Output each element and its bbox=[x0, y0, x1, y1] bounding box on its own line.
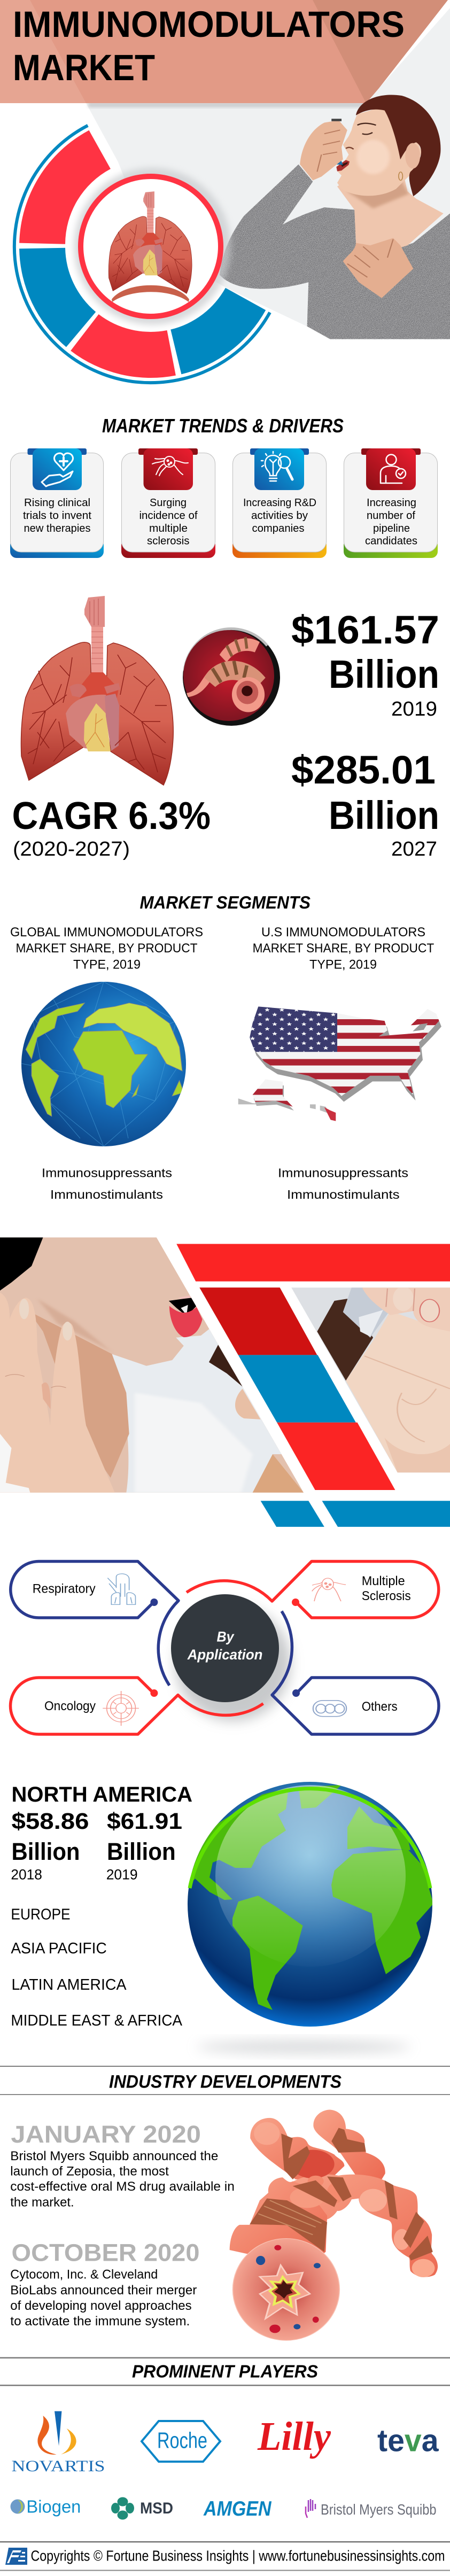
title: MARKET bbox=[13, 47, 155, 88]
callout: others: Others bbox=[362, 1700, 398, 1714]
callout: multiple sclerosis: Multiple bbox=[362, 1574, 405, 1588]
heading: industry developments: INDUSTRY DEVELOPMENTS bbox=[109, 2071, 342, 2092]
right photo bbox=[291, 1286, 450, 1473]
footer bbox=[0, 2542, 450, 2571]
face bbox=[337, 108, 422, 196]
stripes: bottom blue bbox=[261, 1501, 450, 1527]
legend bbox=[278, 1166, 408, 1201]
chart title bbox=[10, 925, 203, 972]
icon: light bulb and magnifier bbox=[261, 452, 292, 481]
callout: respiratory: Respiratory bbox=[33, 1582, 96, 1596]
sweater bbox=[220, 165, 450, 339]
logo: novartis bbox=[12, 2411, 105, 2475]
red circle frame bbox=[81, 176, 221, 316]
heading: prominent players: PROMINENT PLAYERS bbox=[132, 2361, 318, 2381]
text: Rising clinical bbox=[24, 497, 90, 509]
donut segment: red bottom bbox=[71, 314, 176, 378]
icon: respiratory system bbox=[107, 1574, 135, 1604]
logo: roche bbox=[142, 2421, 220, 2462]
regional stats: north america: 2019 bbox=[106, 1866, 138, 1882]
callout: multiple sclerosis: Sclerosis bbox=[362, 1589, 411, 1603]
raised hand bbox=[300, 120, 347, 180]
text: Increasing R&D bbox=[243, 497, 316, 509]
stat: 2027 market size: $285.01 bbox=[291, 748, 436, 792]
icon: lungs small bbox=[108, 191, 192, 302]
logo: Fortune Business Insights mark bbox=[5, 2548, 27, 2565]
regional stats: north america: 2018 bbox=[11, 1866, 42, 1882]
airway branches bbox=[187, 670, 215, 697]
stripe: dark red bbox=[199, 1287, 317, 1355]
development: october 2020 bbox=[10, 2239, 200, 2329]
legend bbox=[42, 1166, 172, 1201]
development: october 2020: to activate the immune system. bbox=[10, 2314, 190, 2329]
text: multiple bbox=[149, 523, 188, 534]
text: Surging bbox=[150, 497, 187, 509]
fingers bbox=[362, 1287, 450, 1331]
regions list: EUROPE bbox=[11, 1906, 71, 1923]
development: january 2020 bbox=[10, 2121, 235, 2210]
development: january 2020: JANUARY 2020 bbox=[11, 2121, 201, 2148]
development: january 2020: Bristol Myers Squibb announced the bbox=[10, 2149, 218, 2163]
callout: multiple sclerosis bbox=[187, 1562, 439, 1618]
photo band: woman and inhaler with coloured stripes bbox=[0, 1237, 450, 1527]
header band bbox=[0, 0, 450, 339]
regional stats: north america bbox=[11, 1783, 192, 1882]
neck shadow bbox=[347, 177, 409, 208]
icon: nerve cell bbox=[312, 1578, 346, 1601]
chart title: GLOBAL IMMUNOMODULATORS bbox=[10, 925, 203, 940]
logo: msd bbox=[111, 2497, 173, 2519]
stripe: blue bbox=[238, 1355, 356, 1423]
logo: lilly: Lilly bbox=[257, 2414, 331, 2459]
icon: person with check badge bbox=[381, 454, 406, 483]
regional stats: north america: Billion bbox=[12, 1838, 80, 1865]
text: Increasing bbox=[367, 497, 416, 509]
eye and brow bbox=[358, 123, 376, 134]
panel: surging multiple sclerosis bbox=[121, 448, 215, 558]
mouth bbox=[179, 1295, 192, 1299]
donut chart graphic bbox=[14, 126, 270, 383]
lips bbox=[336, 160, 350, 171]
donut segment: blue left bbox=[19, 248, 96, 347]
regional stats: north america: Billion bbox=[107, 1838, 176, 1865]
text: number of bbox=[367, 510, 415, 522]
logo: novartis: NOVARTIS bbox=[12, 2457, 105, 2475]
icon: heart in hand bbox=[42, 453, 73, 486]
stat: 2019 market size: $161.57 bbox=[291, 608, 439, 652]
stat: CAGR bbox=[12, 795, 211, 860]
centre circle: Application bbox=[187, 1647, 262, 1663]
title: IMMUNOMODULATORS bbox=[13, 4, 405, 45]
chart title: MARKET SHARE, BY PRODUCT bbox=[16, 941, 198, 956]
left photo bbox=[0, 1237, 304, 1493]
airway cross-section bbox=[233, 2239, 339, 2340]
palm bbox=[346, 1311, 450, 1472]
text: activities by bbox=[251, 510, 308, 522]
text: pipeline bbox=[373, 523, 410, 534]
chart title: MARKET SHARE, BY PRODUCT bbox=[253, 941, 435, 956]
text bbox=[23, 497, 91, 534]
inhaler body bbox=[317, 1299, 373, 1380]
regions list: ASIA PACIFIC bbox=[11, 1940, 107, 1957]
hand on chest bbox=[343, 238, 413, 298]
icon: target on cell bbox=[103, 1691, 139, 1726]
logo: roche: Roche bbox=[157, 2428, 207, 2453]
development: january 2020: cost-effective oral MS drug available in bbox=[10, 2179, 235, 2194]
illustration: low-poly globe bbox=[21, 982, 186, 1146]
title bbox=[13, 4, 405, 88]
callout: others bbox=[272, 1611, 439, 1734]
muscle bands bbox=[250, 2128, 433, 2261]
photo: woman using inhaler bbox=[220, 95, 450, 339]
text bbox=[365, 497, 417, 547]
logo: msd: MSD bbox=[140, 2500, 173, 2517]
thin blue ring bbox=[14, 126, 270, 383]
callout: oncology: Oncology bbox=[44, 1699, 96, 1713]
heading: market segments: MARKET SEGMENTS bbox=[140, 893, 311, 912]
regions list: LATIN AMERICA bbox=[12, 1976, 127, 1993]
branches bbox=[230, 2109, 438, 2277]
stat: 2027 market size: Billion bbox=[329, 793, 439, 837]
stripe: red bbox=[277, 1423, 395, 1490]
stat: 2019 market size: 2019 bbox=[391, 698, 437, 720]
regional stats: north america: $58.86 bbox=[12, 1809, 89, 1834]
centre shadow bbox=[175, 1605, 291, 1721]
development: october 2020: OCTOBER 2020 bbox=[12, 2239, 200, 2267]
shirt bbox=[112, 1325, 287, 1493]
legend: Immunosuppressants bbox=[42, 1166, 172, 1180]
jaw shadow bbox=[40, 1301, 105, 1348]
chart title: TYPE, 2019 bbox=[309, 957, 377, 972]
panel: pipeline candidates bbox=[344, 448, 438, 558]
panel: rising clinical trials bbox=[10, 448, 104, 558]
callout: oncology bbox=[11, 1678, 263, 1734]
illustration: bronchial tube cross-section bbox=[230, 2109, 438, 2340]
stat: CAGR: (2020-2027) bbox=[13, 838, 130, 860]
stat: 2027 market size: 2027 bbox=[391, 838, 437, 860]
callout: respiratory bbox=[11, 1562, 179, 1686]
development: october 2020: of developing novel approaches bbox=[10, 2299, 192, 2313]
donut segment: red upper left bbox=[19, 130, 111, 244]
text: new therapies bbox=[24, 523, 91, 534]
band shadow bbox=[88, 102, 366, 107]
development: january 2020: launch of Zeposia, the most bbox=[10, 2164, 169, 2179]
panel: global market share bbox=[10, 925, 203, 1201]
logo: teva: teva bbox=[377, 2424, 439, 2458]
development: october 2020: BioLabs announced their merger bbox=[10, 2283, 197, 2298]
stat: 2027 market size bbox=[291, 748, 439, 860]
logo: biogen: Biogen bbox=[26, 2497, 81, 2517]
stat: 2019 market size bbox=[291, 608, 439, 720]
text: candidates bbox=[365, 536, 417, 547]
illustration: large globe bbox=[188, 1782, 433, 2053]
legend: Immunostimulants bbox=[287, 1188, 400, 1201]
donut segment: blue lower right bbox=[170, 288, 266, 374]
illustration: lungs large bbox=[21, 596, 173, 785]
diagram: by application bbox=[11, 1562, 439, 1734]
chart title: TYPE, 2019 bbox=[73, 957, 141, 972]
text bbox=[139, 497, 198, 547]
fingers and palm bbox=[0, 1298, 115, 1493]
text: sclerosis bbox=[147, 536, 189, 547]
regional stats: north america: $61.91 bbox=[107, 1809, 182, 1834]
grey photo backdrop bbox=[86, 8, 450, 339]
panel: increasing R&D bbox=[232, 448, 327, 558]
legend: Immunostimulants bbox=[50, 1188, 163, 1201]
chart title: U.S IMMUNOMODULATORS bbox=[261, 925, 425, 940]
regions list bbox=[11, 1906, 183, 2029]
stripe: top red bbox=[176, 1244, 450, 1282]
centre circle bbox=[171, 1594, 279, 1702]
neck bbox=[29, 1311, 129, 1478]
far skin bbox=[253, 1454, 304, 1493]
chart title bbox=[253, 925, 435, 972]
text: trials to invent bbox=[23, 510, 91, 522]
face bbox=[43, 1237, 189, 1366]
development: january 2020: the market. bbox=[10, 2195, 74, 2210]
text: incidence of bbox=[139, 510, 198, 522]
stat: 2019 market size: Billion bbox=[329, 652, 439, 696]
panel: U.S market share bbox=[238, 925, 442, 1201]
earring bbox=[399, 172, 402, 180]
text bbox=[243, 497, 316, 534]
legend: Immunosuppressants bbox=[278, 1166, 408, 1180]
ring shadow bbox=[74, 168, 231, 325]
inhaler mouthpiece bbox=[343, 1287, 390, 1338]
icon: nerve cell bbox=[152, 456, 188, 476]
regions list: MIDDLE EAST & AFRICA bbox=[11, 2012, 183, 2029]
illustration: inflamed airway circle bbox=[183, 629, 280, 726]
icon: pill capsule bbox=[313, 1701, 346, 1717]
centre circle: By bbox=[217, 1629, 235, 1645]
heading: market trends and drivers: MARKET TRENDS & DRIVERS bbox=[102, 415, 344, 437]
logo: amgen: AMGEN bbox=[203, 2497, 271, 2520]
stat: CAGR: CAGR 6.3% bbox=[12, 795, 211, 837]
text: companies bbox=[252, 523, 305, 534]
development: october 2020: Cytocom, Inc. & Cleveland bbox=[10, 2268, 158, 2282]
illustration: U.S flag map bbox=[238, 1004, 442, 1121]
regional stats: north america: NORTH AMERICA bbox=[12, 1783, 192, 1806]
